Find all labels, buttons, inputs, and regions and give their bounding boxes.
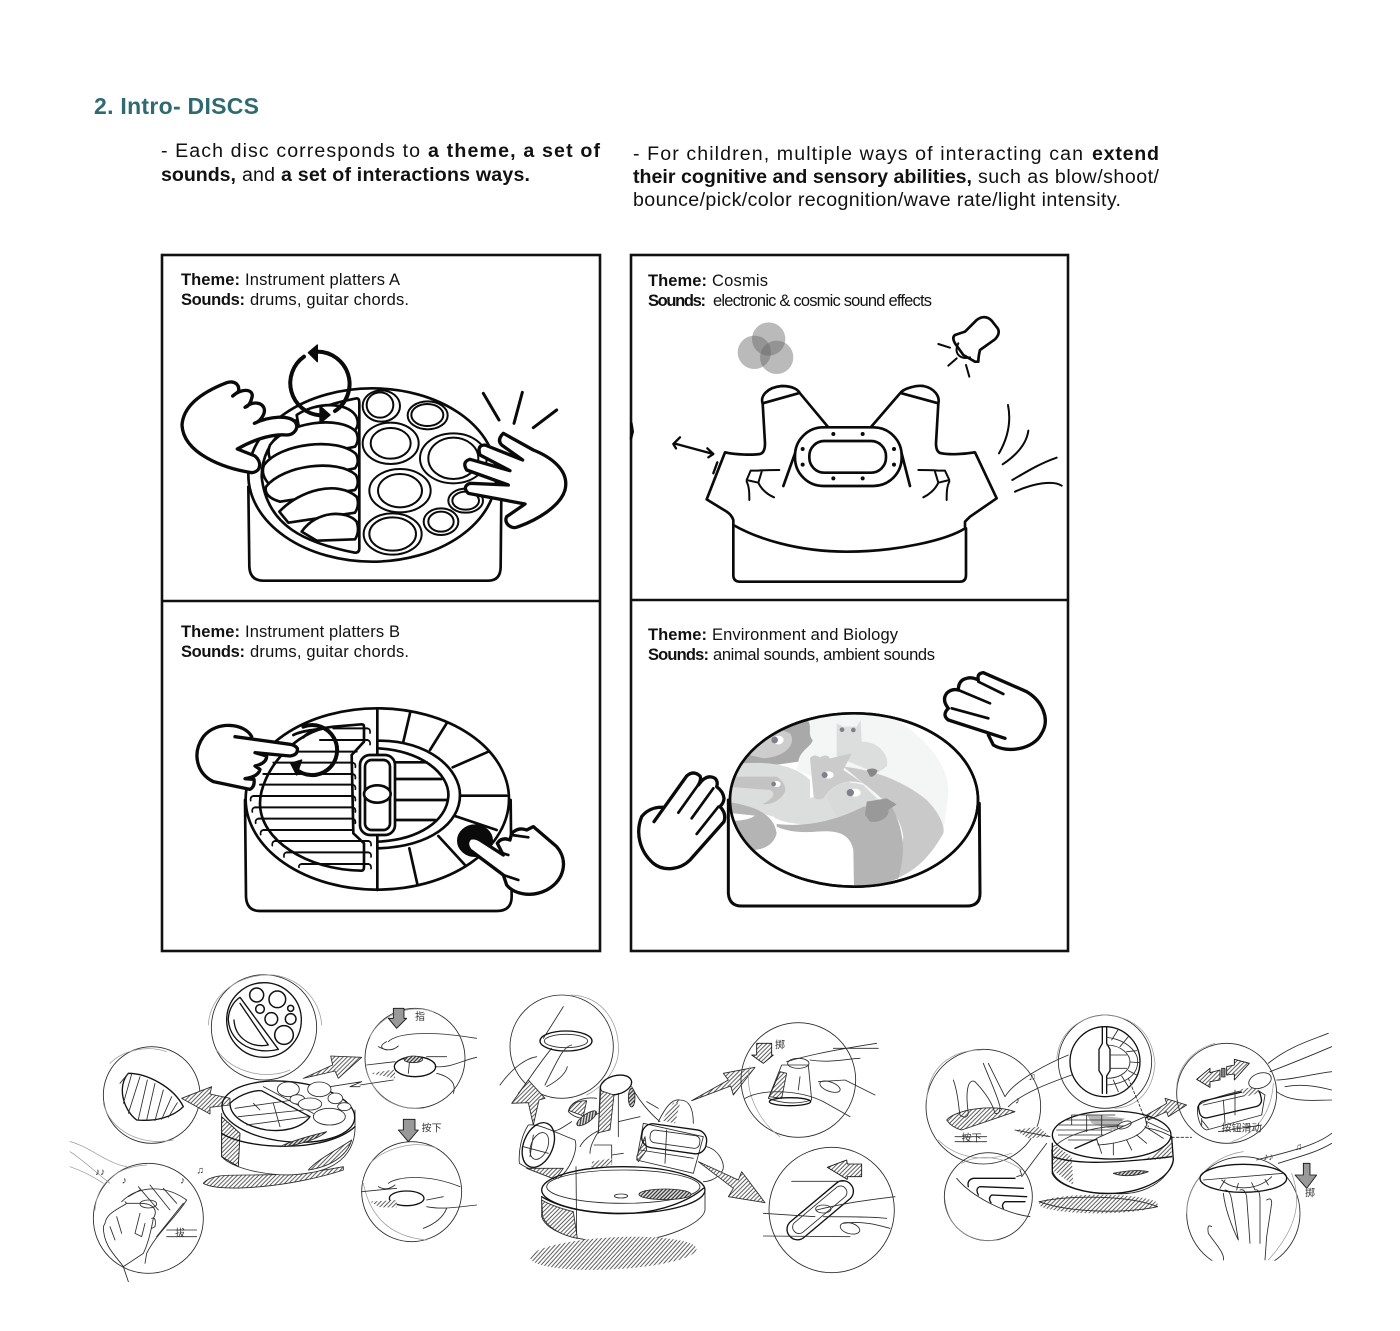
caption: instrument platters B: drums, guitar chords. xyxy=(250,643,409,661)
caption: instrument platters A: Theme: xyxy=(181,271,240,289)
sketch: platter B concept: 按钮滑动 xyxy=(1222,1122,1262,1135)
sketch: platter B concept: ♫ xyxy=(1295,1142,1302,1153)
sketch: platter A concept: ♪ xyxy=(180,1175,185,1186)
caption: environment and biology xyxy=(648,626,935,664)
sketch: platter A concept: ♪ xyxy=(122,1175,127,1186)
icon: instrument platters B disc xyxy=(197,708,563,911)
icon: cosmis disc xyxy=(631,317,1062,582)
panel: right column frames xyxy=(631,255,1068,951)
caption: cosmis: Sounds: xyxy=(648,292,706,310)
caption: cosmis: Theme: xyxy=(648,272,707,290)
panel: left column frames xyxy=(162,255,600,951)
caption: environment and biology: Sounds: xyxy=(648,646,709,664)
sketch: platter B concept: ♪♪ xyxy=(1263,1152,1273,1163)
text block: children interaction: bounce/pick/color recognition/wave rate/light intensity. xyxy=(633,189,1121,211)
caption: instrument platters A: drums, guitar chords. xyxy=(250,291,409,309)
sketch: platter B concept: ♪ xyxy=(1015,1095,1020,1106)
text block: children interaction: extend xyxy=(1092,143,1159,165)
caption: cosmis: electronic & cosmic sound effects xyxy=(713,292,932,310)
sketch: platter A concept: ♫ xyxy=(197,1165,204,1176)
caption: environment and biology: animal sounds, ambient sounds xyxy=(713,646,935,664)
caption: instrument platters B: Theme: xyxy=(181,623,240,641)
caption: cosmis: Cosmis xyxy=(712,272,768,290)
text block: children interaction: - For children, multiple ways of interacting can xyxy=(633,143,1083,165)
caption: cosmis xyxy=(648,272,932,310)
text block: children interaction xyxy=(633,143,1160,211)
caption: instrument platters B: Instrument platters B xyxy=(245,623,400,641)
icon: instrument platters A disc xyxy=(182,345,566,581)
sketch: platter B concept xyxy=(926,1015,1332,1274)
text block: disc description: a set of interactions ways. xyxy=(281,164,530,186)
text block: disc description: sounds, xyxy=(161,164,236,186)
text block: disc description: a theme, a set of xyxy=(428,140,600,162)
caption: instrument platters B xyxy=(181,623,409,661)
sketch: platter B concept: ♫ xyxy=(1028,1072,1036,1083)
text block: children interaction: their cognitive and sensory abilities, xyxy=(633,166,972,188)
caption: instrument platters A xyxy=(181,271,409,309)
sketch: cosmis concept: 掷 xyxy=(775,1038,785,1051)
caption: environment and biology: Theme: xyxy=(648,626,707,644)
sketch: platter A concept: 按下 xyxy=(422,1122,442,1135)
sketch: cosmis concept xyxy=(500,995,895,1274)
caption: instrument platters A: Instrument platters A xyxy=(245,271,400,289)
title: 2. Intro- DISCS xyxy=(94,93,259,119)
sketch: platter A concept xyxy=(70,975,477,1282)
sketch: platter A concept: ♪♪ xyxy=(95,1167,105,1178)
text block: disc description xyxy=(161,140,600,186)
text block: children interaction: such as blow/shoot/ xyxy=(978,166,1160,188)
sketch: platter B concept: 按下 xyxy=(962,1132,982,1145)
caption: environment and biology: Environment and Biology xyxy=(712,626,899,644)
sketch: platter A concept: 指 xyxy=(415,1010,425,1023)
icon: environment and biology disc xyxy=(639,673,1045,906)
sketch: platter B concept: 掷 xyxy=(1305,1187,1315,1200)
caption: instrument platters A: Sounds: xyxy=(181,291,245,309)
text block: disc description: - Each disc corresponds to xyxy=(161,140,420,162)
caption: instrument platters B: Sounds: xyxy=(181,643,245,661)
text block: disc description: and xyxy=(242,164,275,186)
sketch: platter A concept: 拔 xyxy=(175,1227,185,1240)
